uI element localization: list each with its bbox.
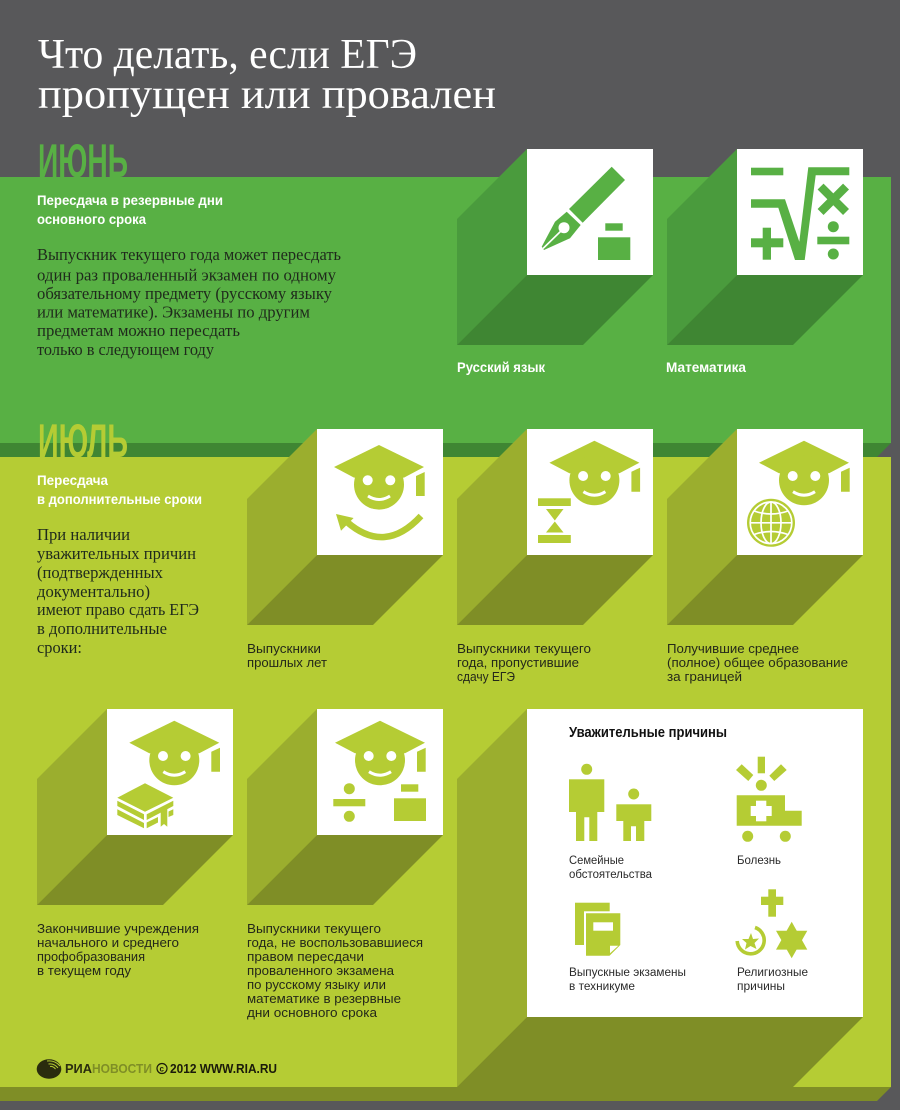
july body text: сроки:: [37, 638, 82, 657]
caption: educated abroad: за границей: [667, 669, 742, 684]
caption: unused retake: по русскому языку или: [247, 977, 386, 992]
caption: family: Семейные: [569, 855, 624, 867]
june body text: один раз проваленный экзамен по одному: [37, 266, 336, 284]
caption: vocational graduates: начального и среднего: [37, 935, 179, 950]
icon: pen and ink: [542, 167, 630, 260]
caption: religious reasons: [737, 967, 808, 993]
june subheading: Пересдача в резервные дни: [37, 192, 223, 208]
july body text: имеют право сдать ЕГЭ: [37, 600, 199, 619]
caption: educated abroad: Получившие среднее: [667, 641, 799, 656]
caption: educated abroad: [667, 641, 848, 684]
caption: current year absentees: сдачу ЕГЭ: [457, 669, 515, 684]
caption: unused retake: года, не воспользовавшиеся: [247, 935, 423, 950]
caption: vocational graduates: Закончившие учреждения: [37, 921, 199, 936]
caption: current year absentees: [457, 641, 591, 684]
footer: ria novosti logo and copyright: 2012 WWW.RIA.RU: [170, 1061, 277, 1076]
icon: graduate with return arrow: [334, 445, 425, 537]
june body text: [37, 245, 341, 359]
caption: vocational graduates: [37, 921, 199, 978]
july body text: [37, 525, 199, 657]
card: past graduates: [247, 429, 443, 625]
july body text: При наличии: [37, 525, 130, 544]
july body text: документально): [37, 582, 150, 601]
panel: july: [0, 457, 891, 1101]
caption: unused retake: Выпускники текущего: [247, 921, 381, 936]
june body text: или математике). Экзамены по другим: [37, 302, 310, 322]
caption: unused retake: математике в резервные: [247, 991, 401, 1006]
icon: ria logo: [37, 1059, 61, 1079]
title: [38, 32, 496, 118]
caption: current year absentees: Выпускники текущего: [457, 641, 591, 656]
june body text: Выпускник текущего года может пересдать: [37, 245, 341, 264]
footer: ria novosti logo and copyright: НОВОСТИ: [92, 1061, 152, 1076]
icon: graduate with hourglass: [538, 441, 640, 543]
caption: technical school exams: в техникуме: [569, 981, 635, 993]
caption: vocational graduates: профобразования: [37, 949, 145, 964]
july body text: (подтвержденных: [37, 563, 163, 582]
july body text: уважительных причин: [37, 544, 196, 563]
card: educated abroad: [667, 429, 863, 625]
caption: unused retake: дни основного срока: [247, 1005, 378, 1020]
icon: documents: [575, 903, 622, 957]
caption: vocational graduates: в текущем году: [37, 963, 131, 978]
heading: valid reasons: Уважительные причины: [569, 724, 727, 741]
icon: religious symbols: [737, 889, 807, 958]
icon: graduate with globe: [747, 441, 850, 547]
caption: religious reasons: причины: [737, 981, 785, 993]
caption: past graduates: Выпускники: [247, 641, 321, 656]
card: vocational graduates: [37, 709, 233, 905]
caption: unused retake: [247, 921, 423, 1020]
icon: math symbols: [751, 167, 859, 260]
panel: june: [0, 177, 891, 457]
july subheading: [37, 472, 202, 507]
card: unused retake: [247, 709, 443, 905]
july subheading: Пересдача: [37, 472, 108, 488]
icon: family: [569, 764, 651, 841]
june subheading: [37, 192, 223, 227]
caption: technical school exams: Выпускные экзамены: [569, 967, 686, 979]
card: current year absentees: [457, 429, 653, 625]
icon: graduate with math and ink: [333, 721, 426, 822]
card: russian language: [457, 149, 653, 345]
card: mathematics: [667, 149, 863, 345]
label: mathematics: Математика: [666, 359, 746, 375]
caption: past graduates: прошлых лет: [247, 655, 327, 670]
june body text: только в следующем году: [37, 340, 214, 359]
caption: technical school exams: [569, 967, 686, 993]
july subheading: в дополнительные сроки: [37, 491, 202, 507]
heading: june: ИЮНЬ: [38, 136, 128, 188]
icon: graduate with book: [117, 721, 220, 828]
title: пропущен или провален: [38, 72, 496, 118]
caption: educated abroad: (полное) общее образование: [667, 655, 848, 670]
footer: ria novosti logo and copyright: c: [160, 1064, 164, 1074]
caption: religious reasons: Религиозные: [737, 967, 808, 979]
caption: illness: Болезнь: [737, 855, 781, 867]
july body text: в дополнительные: [37, 619, 167, 638]
caption: family: обстоятельства: [569, 869, 653, 881]
june body text: обязательному предмету (русскому языку: [37, 284, 332, 303]
footer: ria novosti logo and copyright: [37, 1059, 277, 1079]
icon: ambulance: [736, 757, 802, 842]
caption: current year absentees: года, пропустившие: [457, 655, 579, 670]
june subheading: основного срока: [37, 211, 146, 227]
footer: ria novosti logo and copyright: РИА: [65, 1061, 93, 1076]
panel: valid reasons: [457, 709, 863, 1087]
label: russian language: Русский язык: [457, 359, 546, 375]
caption: unused retake: проваленного экзамена: [247, 963, 395, 978]
heading: july: ИЮЛЬ: [38, 416, 128, 468]
caption: family: [569, 855, 653, 881]
title: Что делать, если ЕГЭ: [38, 32, 417, 78]
caption: unused retake: правом пересдачи: [247, 949, 364, 964]
june body text: предметам можно пересдать: [37, 321, 240, 340]
caption: past graduates: [247, 641, 327, 670]
